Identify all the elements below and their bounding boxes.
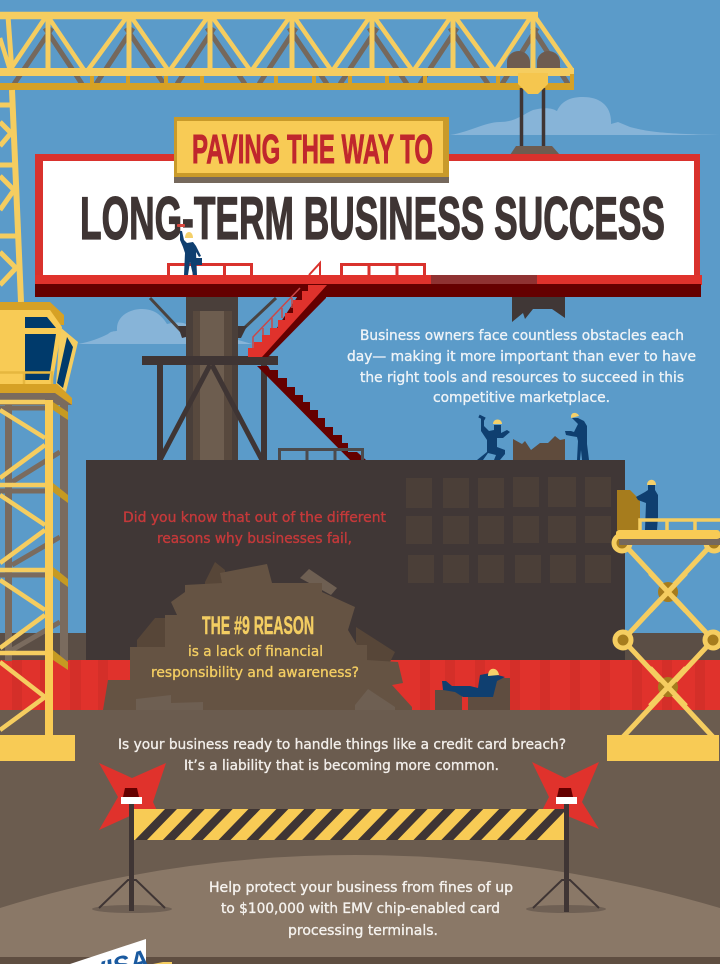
truss brown shadow diagonals xyxy=(14,28,568,84)
right tripod xyxy=(533,880,599,908)
column shaft xyxy=(186,297,238,460)
rubble blocks by resting worker xyxy=(435,678,510,710)
cloud left xyxy=(78,309,252,344)
lower mound xyxy=(0,855,720,964)
stair body xyxy=(248,285,327,357)
lower wall strip xyxy=(0,633,720,660)
board face xyxy=(177,121,443,173)
ninth reason text xyxy=(151,644,359,681)
worker painting xyxy=(177,224,202,275)
building xyxy=(0,460,720,660)
cab rail xyxy=(0,372,52,384)
column struts xyxy=(150,298,276,332)
stair handrail xyxy=(253,288,300,348)
lift railing xyxy=(640,520,720,530)
cab floor xyxy=(0,384,72,405)
building windows xyxy=(406,477,611,583)
credit card breach question: It’s a liability that is becoming more common. xyxy=(184,758,499,774)
left post xyxy=(129,804,134,911)
lift arms xyxy=(623,543,713,737)
visa card xyxy=(70,939,152,964)
lift deck underside xyxy=(619,538,720,545)
column highlight xyxy=(193,311,232,460)
hazard barrier xyxy=(134,809,564,840)
did you know text xyxy=(123,510,386,547)
worker kneeling with hammer xyxy=(477,416,510,460)
board shadow xyxy=(174,170,449,183)
mast grey bracing xyxy=(0,408,60,650)
crane mast upper xyxy=(0,90,21,302)
cab window side xyxy=(57,337,73,388)
sign mount xyxy=(510,146,560,155)
cab roof xyxy=(0,302,64,325)
left barrier stand xyxy=(92,788,172,913)
protect your business text: processing terminals. xyxy=(288,923,438,939)
hammer xyxy=(479,416,485,419)
worker on lift xyxy=(636,480,658,530)
resting worker hat xyxy=(488,669,499,676)
rubble light piece top xyxy=(300,569,337,595)
credit card breach question xyxy=(118,737,566,774)
column behind sign xyxy=(150,297,276,460)
container ribs xyxy=(12,660,705,710)
ninth reason text: is a lack of financial xyxy=(188,644,323,660)
ninth reason heading: THE #9 REASON xyxy=(202,612,314,640)
scaffold deck xyxy=(142,356,278,365)
lift worker hat xyxy=(647,480,656,485)
protect your business text: to $100,000 with EMV chip-enabled card xyxy=(221,901,500,917)
small stair rail xyxy=(309,263,320,275)
broken wall on roof xyxy=(513,436,565,460)
red container band xyxy=(0,660,720,710)
lift pivots centre xyxy=(658,582,678,602)
scaffold braces xyxy=(160,365,262,460)
kneeling worker hat xyxy=(493,420,502,424)
ground railing xyxy=(280,450,362,460)
barrier left star xyxy=(99,763,166,830)
bottom strip xyxy=(0,957,720,964)
intro text: competitive marketplace. xyxy=(433,390,610,406)
crane trolley xyxy=(507,51,560,155)
worker standing with hammer xyxy=(565,413,589,460)
mast grey legs xyxy=(5,405,12,661)
did you know text: reasons why businesses fail, xyxy=(157,531,352,547)
intro text xyxy=(347,328,696,406)
left railing on ledge xyxy=(168,264,252,275)
intro text: day— making it more important than ever to have xyxy=(347,349,696,365)
did you know text: Did you know that out of the different xyxy=(123,510,386,526)
truss hangers xyxy=(90,74,574,84)
paint roller xyxy=(177,224,185,227)
billboard xyxy=(35,154,702,322)
building wall xyxy=(86,460,625,660)
barrier black stripes xyxy=(135,809,564,840)
paint bucket xyxy=(196,258,202,265)
lift base xyxy=(607,735,719,761)
brown block on lift xyxy=(617,490,640,530)
billboard underside xyxy=(35,284,701,297)
right lamp xyxy=(557,788,573,797)
mast yellow upright xyxy=(45,400,53,736)
ninth reason text: responsibility and awareness? xyxy=(151,665,359,681)
barrier yellow base xyxy=(134,809,564,840)
lower stairs xyxy=(257,366,366,460)
mast yellow gussets xyxy=(53,402,68,670)
left stand shadow xyxy=(92,905,172,913)
billboard ledge xyxy=(35,275,702,285)
rubble light pieces bottom xyxy=(136,695,203,710)
painter body xyxy=(180,231,201,275)
rubble back pieces xyxy=(137,562,395,665)
scaffold legs xyxy=(157,365,163,460)
mast yellow bracing xyxy=(0,402,45,730)
right post xyxy=(564,804,569,912)
trolley body xyxy=(518,73,548,94)
painter hat xyxy=(185,232,193,238)
crane cab xyxy=(0,302,78,405)
trolley wheels xyxy=(507,51,560,68)
cloud right xyxy=(450,97,720,135)
right railing on ledge xyxy=(342,264,424,275)
crane mast lower xyxy=(0,400,75,761)
yellow card corner xyxy=(153,962,172,964)
rubble main mass xyxy=(103,564,412,710)
sign board xyxy=(174,117,449,183)
truss yellow chords and web xyxy=(0,16,574,72)
right stand shadow xyxy=(526,905,606,913)
credit card breach question: Is your business ready to handle things like a credit card breach? xyxy=(118,737,566,753)
board heading: PAVING THE WAY TO xyxy=(192,126,433,172)
mast base xyxy=(0,735,75,761)
crane jib truss xyxy=(0,16,574,90)
worker resting xyxy=(442,669,505,697)
cab window top xyxy=(25,317,56,328)
cab window main xyxy=(25,334,56,380)
protect your business text xyxy=(209,880,513,939)
cab side frame xyxy=(56,327,78,392)
board frame xyxy=(174,117,449,177)
cab front xyxy=(0,310,62,385)
left tripod xyxy=(99,880,165,908)
intro text: the right tools and resources to succeed in this xyxy=(360,370,684,386)
lift pivots xyxy=(615,632,631,648)
billboard frame xyxy=(35,154,700,279)
torn underside piece xyxy=(512,297,565,322)
protect your business text: Help protect your business from fines of up xyxy=(209,880,513,896)
left lamp xyxy=(123,788,139,797)
stair shadow xyxy=(258,285,327,357)
ground xyxy=(0,710,720,964)
rubble pile xyxy=(103,562,412,710)
right barrier stand xyxy=(526,788,606,913)
billboard panel xyxy=(43,161,694,275)
standing worker hat xyxy=(571,413,579,418)
lift deck xyxy=(616,530,720,539)
scissor lift xyxy=(607,480,720,761)
truss lower chord xyxy=(0,83,574,90)
barrier right star xyxy=(532,762,599,830)
trolley cables xyxy=(522,88,544,147)
upper stairs xyxy=(248,285,327,357)
scaffold under column xyxy=(142,356,278,460)
intro text: Business owners face countless obstacles each xyxy=(360,328,684,344)
